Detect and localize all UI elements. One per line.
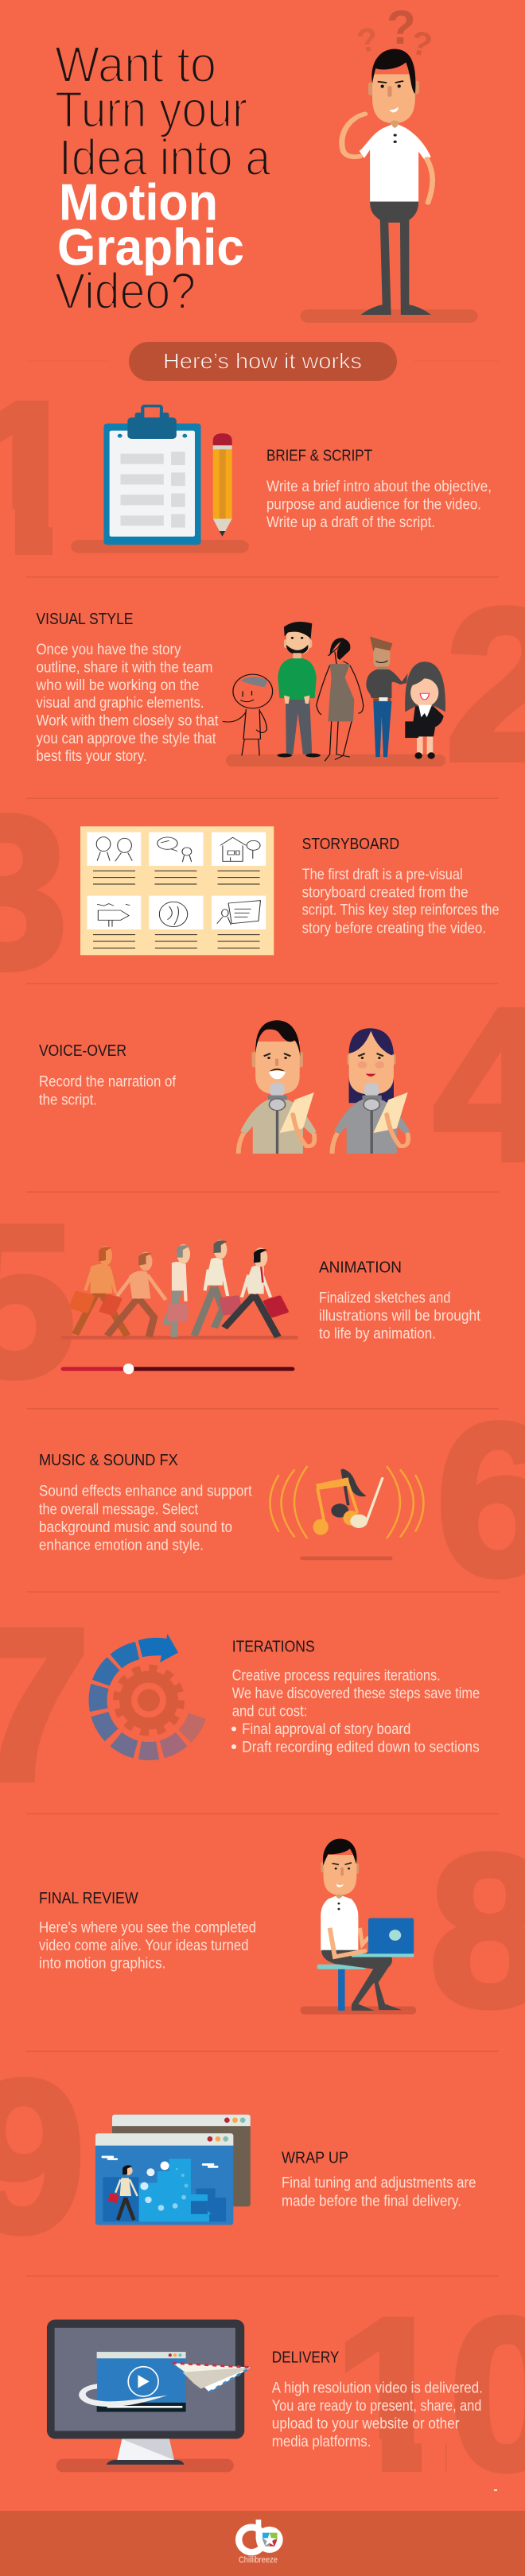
body text: the script.	[39, 1092, 97, 1108]
title: Motion	[59, 173, 218, 231]
illustration: team of characters	[223, 622, 445, 766]
body text	[39, 1074, 177, 1108]
body text	[39, 1919, 256, 1973]
panel: step 2 visual style	[36, 564, 525, 805]
panel: step 10 delivery	[46, 2314, 525, 2528]
body text: A high resolution video is delivered.	[272, 2380, 483, 2396]
icon: question marks: ?	[407, 23, 435, 64]
body text: upload to your website or other	[272, 2416, 460, 2433]
walker 3	[165, 1244, 190, 1337]
title: Graphic	[57, 218, 244, 276]
body text: Write a brief intro about the objective,	[266, 479, 492, 495]
panel: step 1 brief and script	[0, 357, 492, 599]
heading: FINAL REVIEW	[39, 1890, 138, 1907]
body text: Write up a draft of the script.	[266, 514, 435, 531]
heading: STORYBOARD	[302, 836, 399, 853]
walker 1	[68, 1246, 127, 1336]
how it works pill	[129, 342, 397, 381]
heading: WRAP UP	[282, 2150, 348, 2167]
heading: MUSIC & SOUND FX	[39, 1452, 178, 1469]
illustration: storyboard sheet	[80, 826, 274, 955]
walker 4	[194, 1240, 243, 1336]
body text: background music and sound to	[39, 1519, 232, 1536]
body text: illustrations will be brought	[319, 1308, 481, 1325]
body text	[272, 2380, 483, 2450]
body text: Record the narration of	[39, 1074, 177, 1091]
icon: gear with circular arrow	[88, 1634, 206, 1760]
body text	[36, 642, 219, 765]
footer	[0, 2511, 525, 2576]
body text: who will be working on the	[36, 677, 199, 694]
title: Turn your	[55, 81, 247, 138]
heading: DELIVERY	[272, 2349, 339, 2366]
body text: best fits your story.	[37, 748, 146, 765]
body text: the overall message. Select	[39, 1501, 199, 1518]
icon: music notes with sound waves	[270, 1466, 423, 1560]
illustration: two narrators at microphones	[239, 1020, 410, 1154]
small mark	[494, 2489, 497, 2491]
brand name: Chillibreeze	[239, 2555, 278, 2565]
body text: visual and graphic elements.	[37, 695, 204, 712]
heading: BRIEF & SCRIPT	[266, 447, 372, 464]
illustration: thinking man	[301, 49, 478, 323]
illustration: monitor with video and paper plane	[47, 2319, 251, 2472]
logo: cb mark	[239, 2520, 283, 2553]
divider right	[414, 361, 499, 362]
body text: Creative process requires iterations.	[232, 1668, 441, 1685]
icon: question marks: ?	[354, 20, 381, 60]
body text: The first draft is a pre-visual	[302, 867, 463, 883]
panel: step 3 storyboard	[0, 771, 500, 1013]
body text: script. This key step reinforces the	[302, 902, 500, 919]
body text	[319, 1290, 481, 1343]
panel: step 6 music and sound	[39, 1379, 525, 1620]
body text: media platforms.	[272, 2434, 371, 2450]
body text: Work with them closely so that	[37, 713, 219, 730]
walker 5	[224, 1247, 290, 1337]
body text: into motion graphics.	[39, 1956, 165, 1973]
body text: purpose and audience for the video.	[266, 496, 481, 514]
body text: Here's where you see the completed	[39, 1919, 256, 1937]
walker 2	[107, 1252, 165, 1337]
body text: video come alive. Your ideas turned	[39, 1938, 248, 1954]
title: Want to	[55, 36, 216, 93]
panel: step 8 final review	[39, 1810, 525, 2051]
body text: Final tuning and adjustments are	[282, 2175, 476, 2192]
body text: Once you have the story	[37, 642, 181, 658]
title: Video?	[55, 262, 196, 320]
heading: VOICE-OVER	[39, 1042, 126, 1060]
body text: you can approve the style that	[37, 731, 216, 747]
illustration: walking figures and timeline slider	[61, 1240, 298, 1374]
panel: step 9 wrap up	[0, 2035, 476, 2277]
panel: step 5 animation	[0, 1180, 481, 1422]
body text	[266, 479, 492, 531]
icon: question marks: ?	[387, 1, 416, 54]
body text: and cut cost:	[232, 1703, 307, 1720]
body text: Draft recording edited down to sections	[242, 1740, 480, 1756]
body text: made before the final delivery.	[282, 2193, 461, 2210]
illustration: clipboard and pencil	[71, 406, 249, 553]
body text: enhance emotion and style.	[39, 1537, 204, 1554]
body text: Final approval of story board	[242, 1721, 410, 1738]
divider left	[26, 361, 110, 362]
body text	[282, 2175, 476, 2210]
illustration: browser windows with city and walker	[95, 2115, 251, 2225]
heading: VISUAL STYLE	[37, 611, 134, 628]
title	[55, 36, 270, 320]
body text	[39, 1484, 252, 1554]
how it works pill: Here’s how it works	[163, 348, 362, 374]
body text: to life by animation.	[319, 1326, 436, 1343]
title: Idea into a	[59, 129, 270, 186]
icon: question marks	[354, 1, 435, 64]
body text: Sound effects enhance and support	[39, 1484, 252, 1500]
body text: story before creating the video.	[302, 920, 486, 937]
panel: step 4 voice-over	[39, 964, 525, 1205]
body text: outline, share it with the team	[37, 659, 213, 676]
heading: ITERATIONS	[232, 1639, 315, 1656]
panel: header	[26, 1, 499, 381]
body text: Finalized sketches and	[319, 1290, 450, 1306]
body text	[231, 1668, 480, 1756]
body text: You are ready to present, share, and	[272, 2398, 481, 2415]
illustration: man at laptop	[301, 1839, 416, 2014]
heading: ANIMATION	[319, 1259, 402, 1277]
panel: step 7 iterations	[0, 1584, 480, 1825]
body text: We have discovered these steps save time	[232, 1686, 480, 1702]
body text	[302, 867, 500, 937]
body text: storyboard created from the	[302, 884, 469, 901]
